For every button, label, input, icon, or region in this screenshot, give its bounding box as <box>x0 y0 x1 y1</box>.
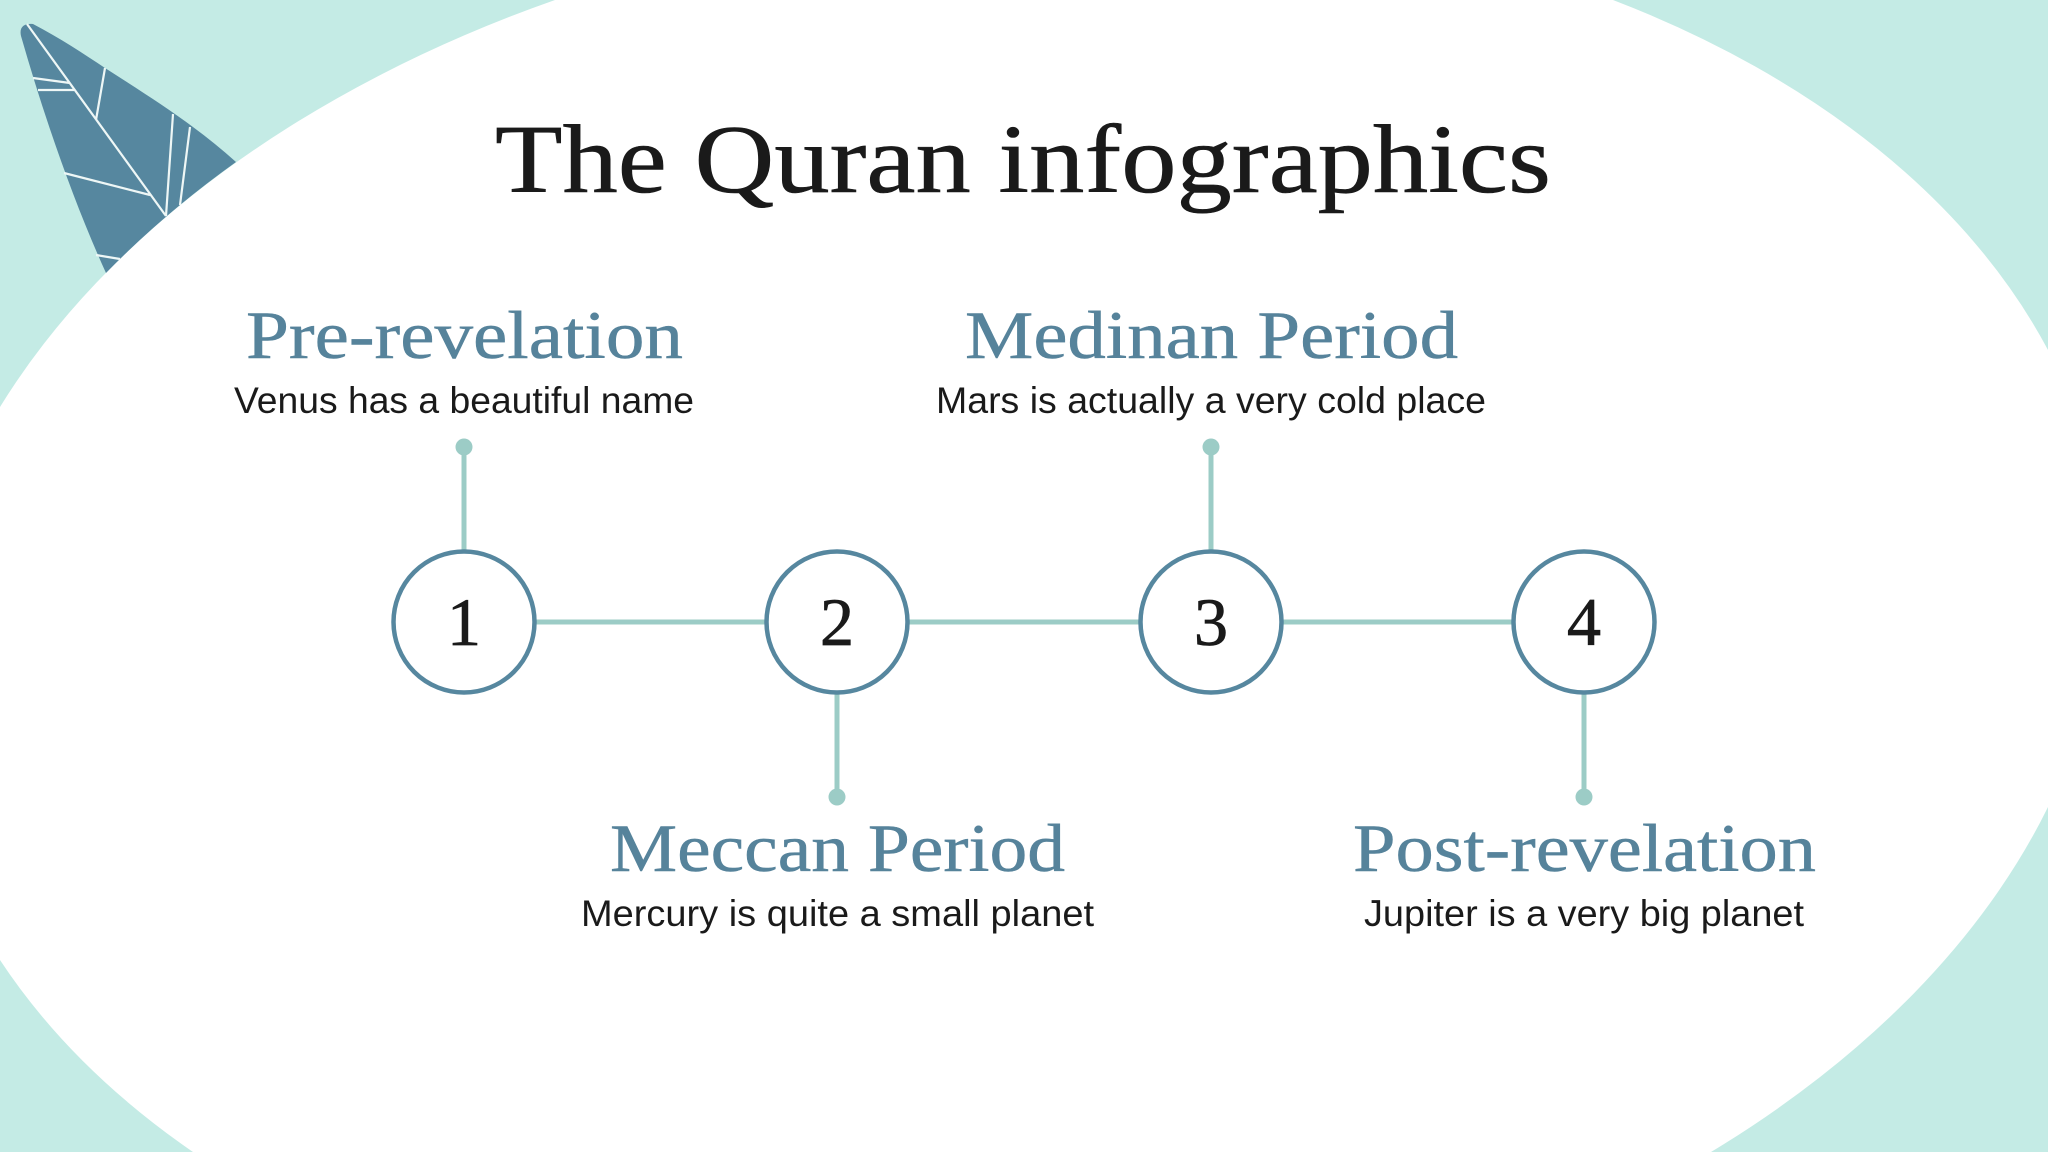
node 1: 1 <box>447 584 481 660</box>
label: Post-revelation <box>1353 810 1816 934</box>
node 3: 3 <box>1194 584 1228 660</box>
label: Pre-revelation <box>234 297 694 421</box>
label: Pre-revelation: Venus has a beautiful name <box>234 380 694 421</box>
title: The Quran infographics <box>495 106 1551 214</box>
icon: leaf <box>21 24 236 273</box>
node 4 <box>1514 552 1654 692</box>
node 2 <box>766 552 908 692</box>
node 1 <box>394 552 534 692</box>
label: Medinan Period: Mars is actually a very cold place <box>936 380 1486 421</box>
label: Post-revelation: Post-revelation <box>1353 810 1816 886</box>
label: Meccan Period: Meccan Period <box>610 810 1065 886</box>
label: Pre-revelation: Pre-revelation <box>246 297 683 373</box>
connector end dots <box>456 438 1592 806</box>
timeline connectors <box>464 447 1584 797</box>
node 4: 4 <box>1567 584 1601 660</box>
label: Medinan Period <box>936 297 1486 421</box>
label: Meccan Period: Mercury is quite a small planet <box>581 893 1095 934</box>
node 2: 2 <box>820 584 854 660</box>
label: Post-revelation: Jupiter is a very big planet <box>1364 893 1805 934</box>
label: Meccan Period <box>581 810 1095 934</box>
label: Medinan Period: Medinan Period <box>965 297 1458 373</box>
node 3 <box>1140 552 1282 692</box>
